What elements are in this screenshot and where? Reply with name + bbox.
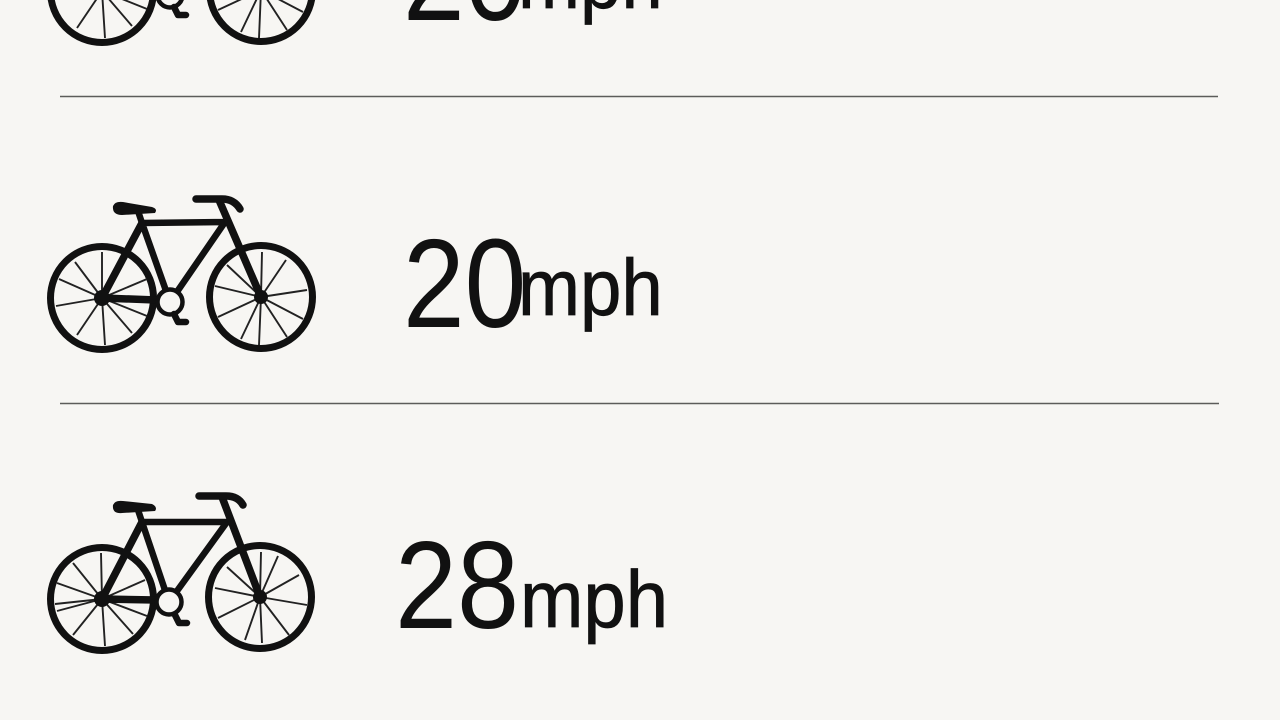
speed label row 3: mph (520, 554, 668, 645)
row 2: bicycle and speed (50, 199, 663, 355)
speed label row 3: 28 (395, 516, 519, 654)
row 1: cropped bicycle and speed (50, 0, 663, 48)
speed label row 2: 20 (403, 214, 526, 355)
icon: bicycle row 3 (50, 496, 312, 650)
speed label row 3 (395, 516, 668, 654)
row 3: bicycle and speed (50, 496, 668, 654)
icon: bicycle row 2 (50, 199, 312, 350)
speed label row 2: mph (518, 244, 663, 333)
speed label row 1 (403, 0, 663, 48)
speed label row 2 (403, 214, 663, 355)
icon: bicycle row 1 (50, 0, 312, 42)
